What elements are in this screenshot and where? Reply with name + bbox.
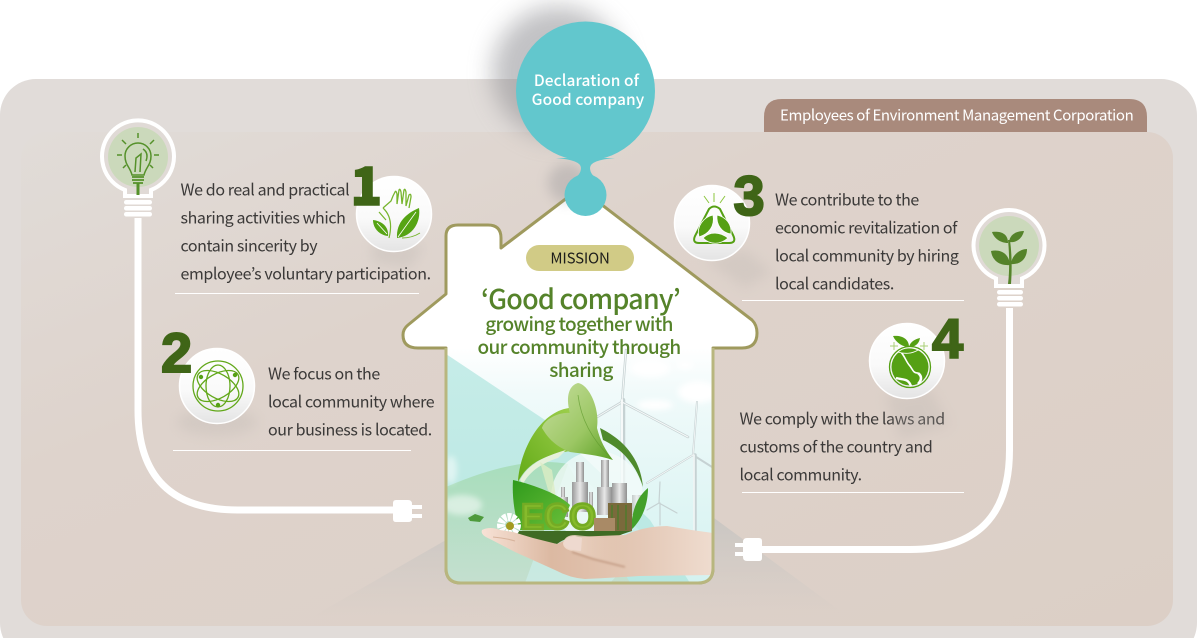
icon: atom <box>177 348 257 436</box>
text 1: We do real and practical <box>180 176 349 200</box>
mission heading: our community through <box>477 333 681 360</box>
text 4: customs of the country and <box>740 434 932 458</box>
text 3: local community by hiring <box>775 242 959 266</box>
text 4 <box>740 406 945 486</box>
small floating leaf <box>468 514 484 522</box>
mission heading: ‘Good company’ <box>481 278 680 317</box>
fingers and thumb <box>493 535 630 567</box>
hand <box>482 526 713 579</box>
declaration bubble shadow <box>492 6 624 203</box>
clouds <box>448 383 712 517</box>
number 3: 3 <box>734 164 765 227</box>
lower leaves <box>513 480 570 530</box>
text 3 <box>775 186 959 294</box>
text 1: sharing activities which <box>180 204 345 228</box>
back leaves <box>518 408 575 482</box>
plug left <box>393 500 422 522</box>
text 1: contain sincerity by <box>180 232 318 256</box>
text 3: local candidates. <box>775 270 894 294</box>
text 4: We comply with the laws and <box>740 406 945 430</box>
plug right <box>735 538 762 561</box>
text 3: economic revitalization of <box>775 214 958 238</box>
front big leaf <box>542 383 613 460</box>
declaration bubble <box>516 22 655 216</box>
text 2: our business is located. <box>268 416 432 440</box>
inner panel <box>21 132 1173 626</box>
list item 2 <box>161 321 435 451</box>
scene: eco illustration <box>442 348 718 583</box>
text 1 <box>180 176 431 284</box>
declaration bubble: Declaration of <box>534 69 640 91</box>
text 2: We focus on the <box>268 360 380 384</box>
text 4: local community. <box>740 462 862 486</box>
bulb glyph <box>117 133 159 195</box>
icon: globe with leaves <box>870 324 950 440</box>
text 3: We contribute to the <box>775 186 919 210</box>
mission heading: sharing <box>549 356 613 383</box>
right power cord <box>735 308 1010 561</box>
number 1: 1 <box>350 145 382 220</box>
left power cord <box>138 218 422 522</box>
mission heading <box>477 278 681 383</box>
buildings <box>557 460 642 517</box>
icon: hands and leaves <box>356 176 432 268</box>
mission pill <box>526 245 634 271</box>
platform <box>513 531 632 544</box>
list item 3 <box>674 164 964 301</box>
mission pill: MISSION <box>550 248 610 268</box>
daisy flower <box>497 513 521 534</box>
ECO moss letters: ECO <box>521 496 596 537</box>
mission house <box>403 188 757 583</box>
number 2: 2 <box>161 321 192 384</box>
glass globe <box>552 452 642 536</box>
bulb 1: light bulb icon <box>102 120 174 216</box>
text 2: local community where <box>268 388 435 412</box>
icon: recycling leaves <box>674 186 772 288</box>
header tab: employees <box>764 99 1147 132</box>
bulb 2: sprout icon <box>974 210 1044 306</box>
sprout glyph <box>991 231 1027 284</box>
list item 1 <box>175 145 432 294</box>
house shape <box>403 188 757 583</box>
wood blocks <box>608 503 632 531</box>
lower frame <box>446 348 713 583</box>
mission heading: growing together with <box>485 310 673 337</box>
list item 4 <box>740 307 964 493</box>
soft shadows under the house <box>310 518 850 618</box>
number 4: 4 <box>932 307 963 370</box>
text 1: employee’s voluntary participation. <box>180 260 431 284</box>
wind turbines <box>597 350 712 533</box>
declaration bubble: Good company <box>532 88 645 110</box>
text 2 <box>268 360 435 440</box>
header tab: employees: Employees of Environment Management Corporation <box>780 104 1133 126</box>
